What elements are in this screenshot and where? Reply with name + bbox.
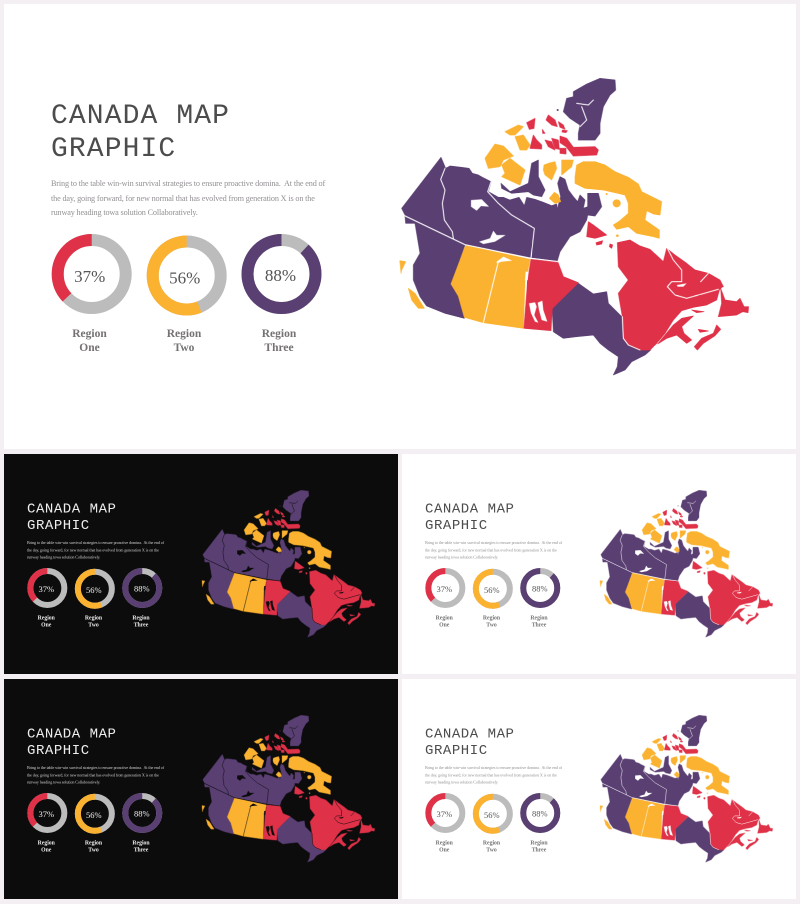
body text: Bring to the table win-win survival strategies to ensure proactive domina. At the end of — [51, 179, 325, 188]
body text: runway heading towa solution Collaboratively. — [27, 554, 101, 560]
map: canada — [202, 490, 375, 637]
title: GRAPHIC — [27, 743, 90, 759]
label: region one: One — [41, 622, 52, 628]
label: region two: Region — [85, 616, 102, 622]
donut: region one 37%: 37% — [74, 267, 105, 286]
donut: region two 56%: 56% — [86, 585, 102, 595]
body text: runway heading towa solution Collaboratively. — [425, 554, 499, 560]
label: region one: Region — [436, 616, 453, 622]
label: region one: Region — [38, 616, 55, 622]
label: region two: Region — [483, 840, 500, 846]
title: CANADA MAP — [425, 502, 515, 518]
body text: runway heading towa solution Collaboratively. — [51, 208, 198, 217]
donut: region two 56%: 56% — [86, 810, 102, 820]
label: region two: Region — [85, 840, 102, 846]
donut: region two 56%: 56% — [484, 810, 500, 820]
title: GRAPHIC — [27, 518, 90, 534]
label: region two: Two — [486, 848, 497, 854]
donut: region three 88%: 88% — [134, 808, 150, 818]
body text: runway heading towa solution Collaboratively. — [27, 780, 101, 784]
label: region one: One — [439, 622, 450, 628]
label: region two: Region — [167, 328, 201, 340]
body text: the day, going forward, for new normal that has evolved from generation X is on the — [425, 548, 557, 554]
donut: region one 37%: 37% — [437, 584, 452, 594]
body text: the day, going forward, for new normal that has evolved from generation X is on the — [425, 772, 557, 778]
title: CANADA MAP — [27, 726, 117, 742]
label: region one: Region — [72, 328, 107, 340]
label: region three: Region — [132, 840, 150, 846]
donut: region two 56%: 56% — [169, 268, 200, 288]
label: region two: Two — [486, 622, 497, 628]
label: region three: Region — [530, 840, 548, 846]
label: region two: Two — [88, 622, 99, 628]
donut: region three 88%: 88% — [532, 808, 548, 818]
map: canada — [400, 78, 749, 375]
donut: region three 88% — [248, 240, 316, 308]
panel: dark slide bottom — [4, 679, 398, 899]
panel: dark slide top — [4, 454, 398, 674]
donut: region three 88%: 88% — [532, 584, 548, 594]
body text: the day, going forward, for new normal that has evolved from generation X is on the — [51, 194, 315, 203]
label: region three: Three — [532, 622, 547, 628]
label: region two: Region — [483, 616, 500, 622]
panel: main light slide — [4, 4, 796, 449]
title: CANADA MAP — [27, 502, 117, 518]
donut: region three 88%: 88% — [134, 584, 150, 594]
label: region three: Three — [134, 622, 149, 628]
title: GRAPHIC — [425, 743, 488, 759]
label: region one: One — [439, 848, 450, 854]
donut: region one 37%: 37% — [39, 584, 54, 594]
body text: Bring to the table win-win survival strategies to ensure proactive domina. At the end of — [27, 540, 164, 545]
body text: Bring to the table win-win survival strategies to ensure proactive domina. At the end of — [27, 765, 164, 770]
donut: region three 88%: 88% — [265, 266, 296, 285]
panel: white slide top — [402, 454, 796, 674]
label: region three: Three — [134, 848, 149, 854]
label: region one: Region — [436, 840, 453, 846]
body text: the day, going forward, for new normal that has evolved from generation X is on the — [27, 548, 159, 554]
title: CANADA MAP — [51, 101, 230, 132]
donut: region two 56% — [153, 242, 221, 310]
title: GRAPHIC — [425, 518, 488, 534]
label: region one: One — [41, 848, 52, 854]
map: canada — [202, 715, 375, 862]
body text: the day, going forward, for new normal that has evolved from generation X is on the — [27, 772, 159, 778]
label: region three: Region — [132, 616, 150, 622]
donut: region one 37%: 37% — [437, 809, 452, 819]
map: canada — [600, 715, 773, 862]
map: canada — [600, 490, 773, 637]
label: region two: Two — [174, 342, 195, 354]
title: GRAPHIC — [51, 134, 176, 165]
body text: Bring to the table win-win survival strategies to ensure proactive domina. At the end of — [425, 765, 562, 770]
title: CANADA MAP — [425, 726, 515, 742]
label: region three: Three — [264, 342, 294, 354]
panel: white slide bottom — [402, 679, 796, 899]
label: region three: Region — [262, 328, 296, 340]
label: region two: Two — [88, 848, 99, 854]
body text: runway heading towa solution Collaboratively. — [425, 780, 499, 784]
label: region one: One — [79, 342, 100, 354]
label: region three: Three — [532, 848, 547, 854]
label: region one: Region — [38, 840, 55, 846]
donut: region one 37% — [58, 240, 126, 308]
donut: region two 56%: 56% — [484, 585, 500, 595]
body text: Bring to the table win-win survival strategies to ensure proactive domina. At the end of — [425, 540, 562, 545]
donut: region one 37%: 37% — [39, 809, 54, 819]
label: region three: Region — [530, 616, 548, 622]
